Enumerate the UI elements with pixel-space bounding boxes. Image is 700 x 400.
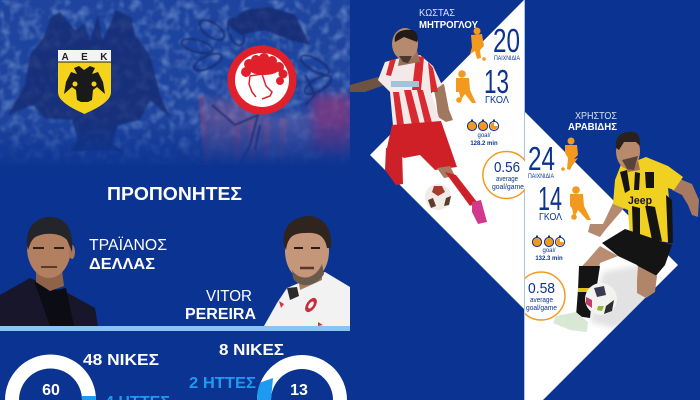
donut chart: Pereira record: 13 bbox=[290, 382, 308, 399]
stat: Aravidis average goal per game: average bbox=[530, 297, 553, 304]
player name: Aravidis: ΑΡΑΒΙΔΗΣ bbox=[568, 122, 617, 133]
stat: Mitroglou goals bbox=[484, 63, 509, 106]
football: Mitroglou bbox=[425, 184, 451, 210]
donut chart: Dellas record: 60 bbox=[42, 382, 60, 399]
watermark: AEK eagle bbox=[8, 10, 170, 152]
icon: orange player shooting bbox=[561, 138, 578, 171]
donut chart: Pereira record bbox=[257, 355, 347, 400]
stat: Aravidis average goal per game: goal/game bbox=[526, 305, 557, 312]
panel: fans photo header bbox=[0, 0, 352, 170]
icon: orange player dribbling bbox=[456, 70, 476, 103]
player name: Mitroglou: ΚΩΣΤΑΣ bbox=[419, 8, 455, 19]
stat: Mitroglou goal per minutes: goal/ bbox=[477, 133, 491, 139]
stat: Mitroglou matches: 20 bbox=[493, 22, 520, 59]
stat: Aravidis matches: ΠΑΙΧΝΙΔΙΑ bbox=[528, 174, 554, 180]
coach name: Pereira bbox=[185, 288, 256, 323]
player: Mitroglou bbox=[350, 28, 487, 224]
player: Aravidis bbox=[553, 132, 699, 332]
coach name: Pereira: VITOR bbox=[206, 288, 252, 305]
stat: Mitroglou goals: 13 bbox=[484, 63, 509, 100]
stat: Mitroglou goal per minutes bbox=[467, 120, 499, 147]
photo: coach Dellas bbox=[0, 217, 98, 326]
label: Pereira wins: 8 ΝΙΚΕΣ bbox=[219, 342, 284, 359]
stat: Aravidis goal per minutes: 132.3 min bbox=[535, 256, 563, 262]
icon: orange player with ball bbox=[470, 28, 486, 61]
stat: Aravidis goal per minutes bbox=[532, 236, 565, 262]
stat: Mitroglou average goal per game: 0.56 bbox=[494, 159, 520, 176]
stat: Mitroglou average goal per game bbox=[483, 152, 530, 198]
football: Aravidis bbox=[585, 283, 617, 315]
coach name: Dellas bbox=[89, 236, 167, 273]
player name: Mitroglou bbox=[419, 8, 478, 31]
player name: Mitroglou: ΜΗΤΡΟΓΛΟΥ bbox=[419, 20, 478, 31]
coach name: Pereira: PEREIRA bbox=[185, 306, 256, 323]
stat: Mitroglou goals: ΓΚΟΛ bbox=[485, 95, 509, 106]
heading: coaches: ΠΡΟΠΟΝΗΤΕΣ bbox=[107, 184, 242, 204]
coach name: Dellas: ΔΕΛΛΑΣ bbox=[89, 256, 155, 273]
watermark: Olympiacos wreath head bbox=[180, 7, 334, 165]
panel: Mitroglou white diamond bbox=[370, 0, 524, 309]
label: Dellas wins: 48 ΝΙΚΕΣ bbox=[83, 352, 159, 369]
icon: Olympiacos crest bbox=[228, 46, 296, 114]
label: Pereira losses: 2 ΗΤΤΕΣ bbox=[189, 375, 256, 392]
photo: coach Pereira bbox=[264, 216, 350, 326]
stat: Mitroglou matches: ΠΑΙΧΝΙΔΙΑ bbox=[494, 56, 520, 62]
player name: Aravidis: ΧΡΗΣΤΟΣ bbox=[575, 111, 617, 122]
divider bar bbox=[0, 326, 350, 331]
panel: Aravidis white diamond bbox=[525, 112, 678, 400]
stat: Aravidis matches bbox=[528, 140, 555, 180]
icon: AEK crest: ΑΕΚ bbox=[62, 52, 108, 63]
icon: orange player running with ball bbox=[570, 186, 591, 220]
stat: Mitroglou matches bbox=[493, 22, 520, 62]
fan stripes bbox=[198, 94, 286, 156]
stat: Mitroglou goal per minutes: 128.2 min bbox=[470, 141, 498, 147]
donut chart: Dellas record bbox=[5, 355, 96, 400]
photo fade bbox=[0, 122, 350, 165]
coach name: Dellas: ΤΡΑΪΑΝΟΣ bbox=[89, 236, 167, 254]
player name: Aravidis bbox=[568, 111, 617, 133]
stat: Aravidis matches: 24 bbox=[528, 140, 555, 177]
stat: Aravidis average goal per game: 0.58 bbox=[528, 280, 555, 297]
stat: Aravidis goals: ΓΚΟΛ bbox=[539, 212, 562, 223]
icon: AEK crest bbox=[58, 50, 111, 114]
stat: Mitroglou average goal per game: average bbox=[496, 176, 518, 183]
stat: Aravidis average goal per game bbox=[525, 271, 566, 321]
stat: Aravidis goals bbox=[538, 180, 562, 223]
stat: Aravidis goals: 14 bbox=[538, 180, 562, 217]
player shadow bbox=[590, 265, 652, 328]
player: Aravidis: Jeep bbox=[628, 195, 652, 207]
stat: Aravidis goal per minutes: goal/ bbox=[542, 248, 556, 254]
center rule bbox=[524, 0, 526, 400]
stat: Mitroglou average goal per game: goal/game bbox=[492, 184, 524, 191]
